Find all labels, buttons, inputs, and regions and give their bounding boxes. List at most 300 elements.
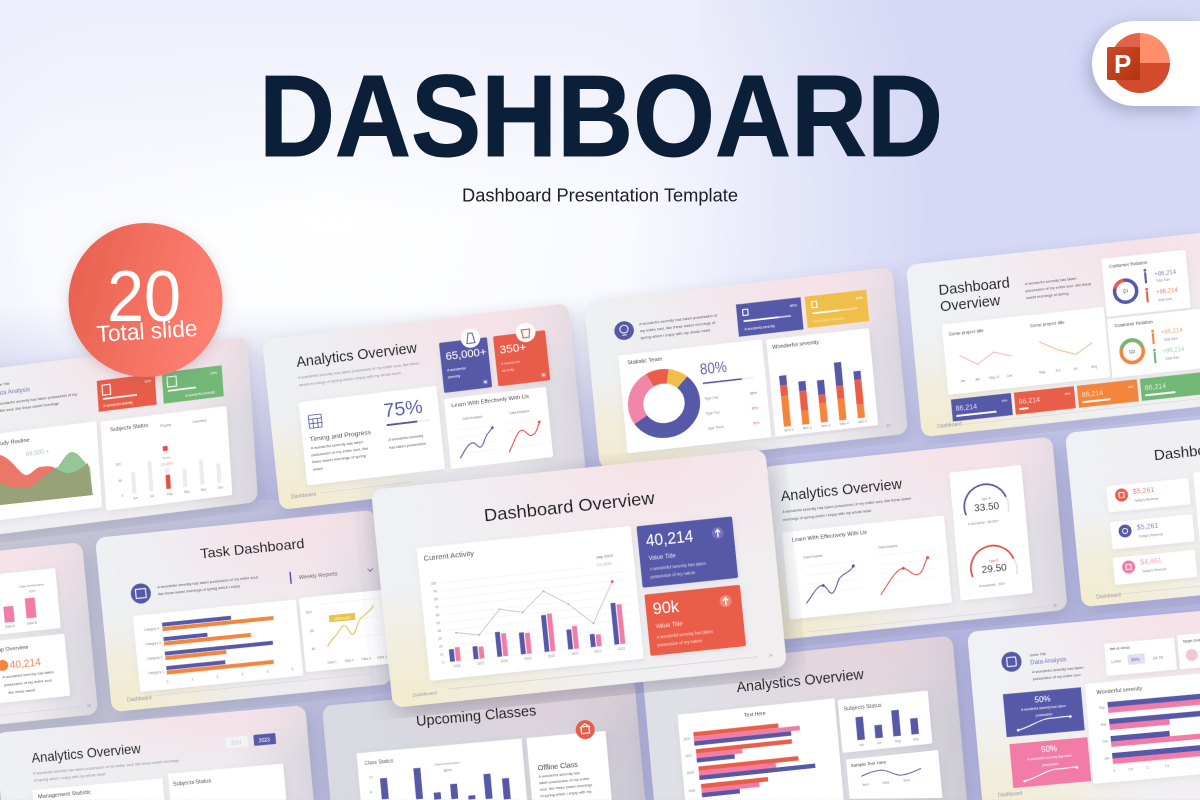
tooltip: July 2023 (596, 553, 614, 560)
panel: current activity chart: 70 (435, 605, 439, 609)
KPI card: blue: 86,214 (955, 404, 978, 413)
heading: Analytics Overview (780, 475, 903, 505)
panel: statistic team donut: 86% (750, 391, 757, 396)
title block: A wonderful serenity has taken (1032, 666, 1084, 675)
gauge: type A: A wonderful · 65,000+ (968, 519, 999, 526)
panel: offline class: taken possession of my entire (539, 777, 589, 785)
card: red stat: 10% (144, 379, 151, 384)
panel: wonderful serenity bars: 1 (1146, 766, 1149, 770)
footer: 13 (886, 424, 891, 428)
panel: timing and progress: Timing and Progress (309, 429, 372, 444)
bars (446, 603, 619, 662)
slide: analytics overview with year tabs (bottom left) (0, 705, 314, 800)
description: sweet mornings of spring which I enjoy with my whole heart. (299, 371, 402, 387)
donut chart (624, 365, 704, 442)
description: sweet mornings of spring. (1026, 292, 1070, 300)
card: pink 50 percent (1009, 737, 1091, 788)
panel: current activity chart: 2019 (524, 656, 532, 661)
description: of spring which I enjoy with my whole heart. (33, 772, 107, 783)
panel: category bar chart: 4 (267, 670, 269, 674)
badge: 20 total slide (68, 223, 222, 377)
panel: current activity chart: 2023 (618, 647, 625, 651)
panel: wonderful serenity stacked bars (766, 328, 878, 437)
panel: current activity chart: 2022 (594, 649, 602, 654)
icon: red card badge (515, 322, 536, 343)
footer: Dashboard (291, 492, 317, 500)
slide: dashboard overview (top right) (906, 230, 1200, 437)
panel: offline class: soul, like these sweet mornings (540, 783, 593, 792)
panel: learn line charts (782, 516, 952, 620)
panel: customer relation Q2: Total Sum (1165, 355, 1180, 361)
panel: statistic team donut: Type Three (707, 425, 724, 431)
panel: category bar chart: Category 4 (144, 626, 160, 632)
panel: sample line chart: Item (903, 778, 910, 783)
card: blue 50 percent (1003, 687, 1085, 737)
panel: current activity chart: 10 (440, 653, 444, 657)
footer (412, 653, 773, 699)
panel: current activity chart: 20 (439, 645, 443, 649)
panel: grouped horizontal bars: 2027 (683, 737, 691, 741)
heading: Upcoming Classes (415, 702, 537, 730)
panel: overview 40,214: A wonderful serenity has taken (2, 670, 54, 680)
panel: project line charts: Aug (1091, 364, 1097, 369)
heading (938, 275, 1012, 316)
panel: customer relation Q2: +86,214 (1162, 347, 1185, 355)
panel: class performance bars: Data B (27, 620, 37, 625)
panel: class statics bar chart: 8 (370, 790, 372, 794)
panel: yellow line chart: Data 3 (361, 657, 371, 662)
panel: class statics bar chart: 10 (369, 775, 373, 779)
panel: statistic team donut: Type Two (706, 410, 720, 416)
KPI card: green (1140, 371, 1200, 401)
KPI card: orange: 10% (1127, 385, 1134, 389)
panel: grouped horizontal bars: 2030 (688, 789, 696, 793)
panel: net vs gross: 1,000 (1111, 658, 1122, 664)
description (639, 314, 720, 340)
revenue card: pink: Today's Revenue (1142, 567, 1167, 574)
panel: subjects status bars: Aug (895, 739, 901, 743)
description: spring which I enjoy with my whole heart. (640, 328, 711, 340)
panel: learn with effectively: Data Analysis (462, 415, 483, 421)
card: red 90k: 90k (652, 598, 681, 619)
panel: customer relation Q1 (1101, 250, 1191, 317)
heading: Overview (939, 292, 1001, 316)
panel: class statics bar chart: Class Performance (434, 760, 460, 766)
panel: subjects status: Nov (201, 487, 207, 492)
panel: subjects status (168, 764, 286, 800)
panel: project line charts: Some project title (1030, 319, 1065, 328)
panel: project line charts: Dec (1007, 374, 1014, 378)
description: A wonderful serenity has taken possession of my entire soul, like these (298, 362, 419, 380)
gauge: type A: Type A (981, 496, 992, 502)
revenue card: red: Today's Revenue (1134, 496, 1159, 503)
panel: class statics bar chart: 80% (443, 767, 452, 773)
card: pink 50 percent: 50% (1041, 744, 1058, 754)
panel: category bar chart: 5 (292, 667, 294, 672)
panel: overview 40,214: like these sweet (8, 688, 36, 695)
KPI card: red (1014, 386, 1076, 415)
card: red stat (97, 374, 157, 412)
panel: category bar chart: 0 (167, 680, 169, 684)
panel: sample line chart: Item (862, 782, 869, 787)
footer: 12 (87, 704, 91, 708)
line (453, 582, 616, 638)
panel: wonderful serenity bars: Sep (1099, 705, 1105, 710)
panel: grouped horizontal bars: 2020 (687, 771, 694, 775)
panel: offline class: A wonderful serenity has (538, 771, 580, 779)
panel: current activity chart: Current Activity (423, 551, 475, 563)
card: green stat: 10% (210, 371, 217, 376)
card: yellow stat: A wonderful serenity (813, 316, 844, 323)
panel: net vs gross: 33.7K (1153, 655, 1164, 661)
gauge: type A (962, 482, 1010, 526)
card: red stat: A wonderful serenity (103, 401, 133, 408)
panel: management statistic (32, 778, 164, 800)
panel: yellow line chart: Data 2 (344, 658, 354, 663)
gauge: type B: Type B (988, 558, 999, 563)
panel: study routine (0, 421, 102, 526)
slide: analystics overview (bottom centre right) (642, 635, 967, 800)
icon: data analysis badge (1001, 651, 1022, 673)
panel: yellow line chart: $0 (312, 647, 316, 651)
title block: Data Analysis (1030, 657, 1067, 667)
panel: customer relation Q1: +86,214 (1154, 270, 1177, 278)
heading: Analytics Overview (296, 340, 419, 371)
panel: current activity chart: 40 (437, 629, 441, 633)
panel: sample line chart: Sample Text Here (850, 759, 887, 768)
panel: net vs gross: 30% (1131, 657, 1140, 663)
panel: wonderful serenity bars: 1.5 (1164, 764, 1169, 768)
panel: category bar chart: 2 (217, 675, 219, 679)
panel: grouped horizontal bars (678, 698, 844, 800)
revenue card: pink: $4,861 (1140, 558, 1162, 567)
card: blue 65,000+: serenity (448, 374, 461, 379)
card: blue 50 percent: 50% (1034, 694, 1051, 705)
card: blue 40,214: 40,214 (645, 527, 694, 550)
panel: offline class: Offline Class (538, 762, 579, 772)
panel: wonderful serenity bars: Wonderful serenity (1096, 686, 1143, 696)
panel: subjects status: Jun (133, 496, 138, 500)
footer: Dashboard (412, 690, 437, 699)
revenue card: pink (1113, 550, 1197, 585)
panel: offline class: of spring which I enjoy with my (540, 790, 592, 798)
panel: current activity chart (417, 526, 644, 681)
card: green stat (162, 365, 224, 404)
panel: learn with effectively: Data Analysis (509, 409, 530, 415)
panel: wonderful serenity stacked bars: Wonderful serenity (772, 340, 820, 351)
icon: briefcase badge (130, 582, 152, 604)
panel: yellow line chart (299, 590, 392, 672)
card: red 350+: 350+ (499, 342, 527, 357)
panel: subjects status: 0 (121, 494, 124, 498)
slide: dashboard revenue (right) (1065, 404, 1200, 607)
panel: project line charts: May 21 (989, 375, 1000, 380)
panel: current activity chart: 0 (442, 660, 445, 665)
card: red 350+: A wonderful (501, 360, 520, 366)
panel: customer relation Q1: Q1 (1122, 288, 1129, 294)
panel: current activity chart: 2017 (477, 661, 485, 666)
icon: offline class badge (575, 719, 596, 740)
title block: Some Title (1029, 652, 1046, 658)
subtitle: Dashboard Presentation Template (462, 186, 738, 206)
card: yellow stat: 80% (856, 296, 863, 301)
slide: upcoming classes (322, 678, 645, 800)
panel: category bar chart: Category 1 (148, 670, 164, 676)
icon: blue card badge (460, 327, 481, 349)
panel: category bar chart: 1 (192, 678, 194, 682)
card: blue 65,000+: A wonderful (447, 366, 466, 372)
panel: customer relation Q2: Q2 (1129, 349, 1136, 354)
panel: timing and progress: these sweet mornings of spring (312, 454, 366, 465)
panel: learn line charts: Data Analysis (803, 553, 823, 560)
slide: analytics overview (top centre left) (262, 303, 586, 510)
gauge: type B (969, 543, 1019, 589)
footer: 15 (1053, 604, 1057, 608)
panel: wonderful serenity stacked bars: Item 3 (821, 424, 831, 429)
panel: right revenue (1193, 463, 1200, 577)
panel: project line charts: Jan (960, 379, 966, 383)
panel: learn line charts: Learn With Effectively With Us (792, 530, 867, 544)
panel: current activity chart: 50 (436, 621, 441, 625)
panel: current activity chart: 2020 (548, 654, 555, 659)
description: A wonderful serenity has taken possession of my entire soul, (157, 575, 259, 589)
panel: customer relation Q1: Total Sum (1156, 278, 1171, 283)
panel: statistic team donut: 80% (699, 358, 728, 379)
footer: Dashboard (998, 791, 1023, 799)
panel: offline class (526, 731, 612, 800)
description (1025, 275, 1092, 300)
revenue card: red (1106, 478, 1191, 512)
footer (1096, 576, 1200, 600)
footer (0, 704, 91, 724)
KPI card: blue (951, 393, 1013, 422)
panel: current activity chart: 2021 (572, 651, 579, 656)
description: A wonderful serenity has taken possession of (639, 314, 718, 326)
panel: subjects status: Physics (160, 423, 172, 428)
card: blue stat: A wonderful serenity (744, 324, 775, 331)
panel: customer relation Q2: +86,214 (1161, 328, 1184, 336)
footer: Dashboard (1096, 592, 1121, 600)
panel: yellow line chart: Data 1 (327, 660, 337, 665)
panel: statistic team donut (618, 339, 771, 454)
card: green stat: A wonderful serenity (185, 390, 215, 398)
revenue card: blue: Today's Revenue (1139, 532, 1164, 539)
panel: wonderful serenity stacked bars: Item 1 (784, 428, 794, 433)
area chart: study routine (0, 452, 93, 505)
panel: wonderful serenity stacked bars: Item 5 (858, 419, 868, 424)
slide: class performance (middle left) (0, 542, 98, 745)
KPI card: green: 86,214 (1144, 383, 1167, 392)
tooltip: 10,000 (596, 561, 612, 569)
panel: timing and progress: possession of my entire soul, like (311, 447, 368, 458)
panel: subjects status: 10,000 (160, 460, 174, 467)
card: blue 40,214: Value Title (648, 553, 677, 562)
panel: category bar chart: Category 3 (145, 641, 161, 647)
heading: Analystics Overview (736, 666, 865, 696)
panel: subjects status bars: Subjects Status (843, 702, 882, 712)
panel: timing and progress: A wonderful serenity has taken (310, 440, 364, 451)
panel: subjects status: Sep (184, 489, 190, 494)
panel: yellow line chart: 1000 USD (334, 616, 351, 621)
panel: overview 40,214: possession of my entire soul, (4, 678, 53, 688)
panel: subjects status: Dec (218, 485, 224, 490)
panel: current activity chart: 2016 (453, 664, 461, 668)
panel: category bar chart (133, 600, 303, 692)
panel: yellow line chart: $10 (306, 610, 312, 615)
panel: subjects status: 100 (115, 463, 121, 467)
heading: Analytics Overview (31, 740, 142, 766)
card: blue stat: 80% (790, 304, 797, 308)
panel: statistic team donut: Statistic Team (627, 357, 663, 366)
footer (807, 604, 1057, 634)
panel: customer relation Q1: +86,214 (1156, 288, 1179, 296)
panel: subjects status (100, 406, 232, 511)
description: possession of my entire soul, like these (1025, 282, 1092, 293)
panel: statistic team donut: 86% (753, 421, 760, 425)
panel: grouped horizontal bars: Text Here (744, 711, 766, 719)
footer: Dashboard (937, 422, 962, 430)
slide: task dashboard (95, 510, 394, 712)
card: blue stat (736, 297, 804, 337)
card: pink 50 percent: possession (1042, 762, 1059, 767)
panel: study routine: 69,500 + (26, 449, 50, 458)
panel: subjects status bars: Sep (913, 737, 919, 741)
panel: subjects status bars: Jul (877, 741, 881, 745)
panel: customer relation Q2: Customer Relation (1114, 319, 1153, 328)
slide: central dashboard overview (371, 449, 787, 708)
panel: category bar chart: Category 2 (146, 655, 163, 661)
panel: current activity chart: 30 (438, 637, 442, 641)
panel: learn with effectively: Learn With Effectively With Us (451, 394, 530, 409)
panel: subjects status: Jul (150, 494, 154, 498)
heading: Task Dashboard (199, 535, 305, 562)
panel: current activity chart: 90 (433, 589, 437, 594)
heading: Dashboard Overview (483, 487, 656, 525)
gauge: type B: A wonderful · 350+ (979, 582, 1006, 589)
slide: analytics overview with gauges (middle right) (762, 437, 1068, 640)
revenue card: blue (1110, 514, 1195, 549)
panel: project line charts: Apr (975, 377, 981, 382)
panel: category bar chart: 3 (242, 672, 244, 677)
panel: customer relation Q2 (1107, 308, 1200, 378)
panel: project line charts: May (1039, 370, 1046, 375)
panel: grouped horizontal bars: 2017 (685, 754, 693, 758)
icon: PowerPoint logo: P (1114, 49, 1131, 79)
panel: subjects status: Chemistry (192, 419, 207, 424)
KPI card: red: 86,214 (1018, 397, 1041, 406)
footer (291, 480, 412, 500)
description: mornings of spring which I enjoy with my whole heart. (783, 509, 873, 522)
panel: net vs gross (1104, 638, 1177, 676)
panel: class performance bars: Data A (5, 624, 16, 629)
card: blue 40,214: possession of my nature (650, 570, 696, 579)
panel: timing and progress: which (313, 466, 323, 472)
panel: yellow line chart: $5 (310, 629, 314, 633)
gauge: type A: 33.50 (974, 501, 1000, 514)
card: red 90k: Value Title (655, 622, 684, 630)
panel: class statics bar chart (356, 738, 527, 800)
card: blue 40,214 (636, 516, 738, 588)
panel: wonderful serenity bars: 0 (1113, 769, 1116, 773)
panel: customer relation Q2: Total Sum (1163, 336, 1178, 342)
panel: wonderful serenity stacked bars: Item 4 (840, 421, 849, 426)
card: red 90k: A wonderful serenity has taken (656, 629, 714, 640)
panel: subjects status: Aug (167, 491, 173, 496)
year tabs (225, 733, 276, 748)
heading: Dashboard (938, 275, 1010, 299)
icon: calendar (308, 414, 322, 428)
card: red 90k: possession of my nature (657, 638, 703, 648)
description: my entire soul, like these sweet mornings of (640, 321, 716, 333)
panel: wonderful serenity bars: 0.5 (1128, 767, 1133, 772)
card: yellow stat (805, 290, 869, 328)
panel: wonderful serenity bars (1085, 668, 1200, 784)
panel: class performance bars: 90% (28, 589, 36, 594)
footer: Dashboard (127, 695, 152, 703)
panel: statistic team donut: 86% (751, 406, 759, 411)
panel: learn line charts: Data Analysis (878, 544, 898, 550)
description: A wonderful serenity has taken (1025, 277, 1077, 286)
panel: current activity chart: 100 (431, 581, 437, 586)
panel: management statistic: Management Statistic (38, 789, 91, 800)
year tabs: 2023 (259, 738, 270, 745)
gauge: type B: 29.50 (981, 562, 1008, 576)
panel: class performance bars (0, 568, 61, 644)
panel: current activity chart: 2018 (501, 659, 508, 664)
KPI card: blue: 10% (1001, 398, 1008, 403)
panel: project line charts: Some project title (949, 328, 984, 337)
panel: subjects status: 50 (118, 479, 122, 483)
card: blue 50 percent: A wonderful serenity has taken (1021, 704, 1066, 712)
title block (1029, 649, 1084, 682)
card: red 90k (644, 585, 746, 656)
card: red 350+ (493, 330, 550, 386)
panel: project line charts (942, 307, 1110, 395)
card: red 350+: serenity (502, 367, 515, 373)
badge: PowerPoint (1092, 21, 1200, 106)
slide: data analysis (top left) (0, 337, 258, 540)
description (782, 497, 913, 522)
panel: current activity chart: 60 (436, 613, 440, 617)
panel: class statics bar chart: Class Statics (364, 758, 394, 767)
KPI card: orange: 86,214 (1081, 390, 1104, 399)
panel: subjects status: Score (162, 455, 171, 460)
revenue card: red: $5,261 (1133, 487, 1155, 496)
panel: customer relation Q1: Total Sum (1158, 297, 1172, 302)
description: A wonderful serenity has taken possession of my entire soul, like these sweet mornings (33, 759, 179, 776)
revenue card: blue: $5,261 (1137, 523, 1159, 532)
panel: gauges (949, 465, 1033, 601)
slide: data analysis (bottom right) (967, 605, 1200, 800)
card: pink 50 percent: A wonderful serenity has taken (1027, 754, 1073, 762)
footer (127, 673, 371, 703)
title block (0, 373, 78, 414)
panel: wonderful serenity bars: Mar (1101, 722, 1107, 727)
panel: current activity chart: 80 (434, 597, 438, 601)
icon: bulb badge (613, 320, 635, 341)
card: blue 65,000+: 65,000+ (445, 347, 487, 363)
panel: subjects status: Subjects Status (110, 423, 149, 434)
panel: timing and progress: has taken possession (389, 442, 427, 450)
panel: yellow line chart: Data 4 (377, 655, 387, 660)
description: A wonderful serenity has taken possession of my entire soul, like these sweet (782, 497, 913, 514)
card: blue 40,214: A wonderful serenity has taken (649, 561, 707, 572)
dropdown: weekly reports (289, 564, 373, 584)
dropdown: weekly reports: Weekly Reports (299, 571, 338, 581)
panel: timing and progress: 75% (383, 397, 424, 422)
panel: sample line chart (846, 750, 942, 800)
title block: possession of my entire soul (1033, 673, 1081, 682)
